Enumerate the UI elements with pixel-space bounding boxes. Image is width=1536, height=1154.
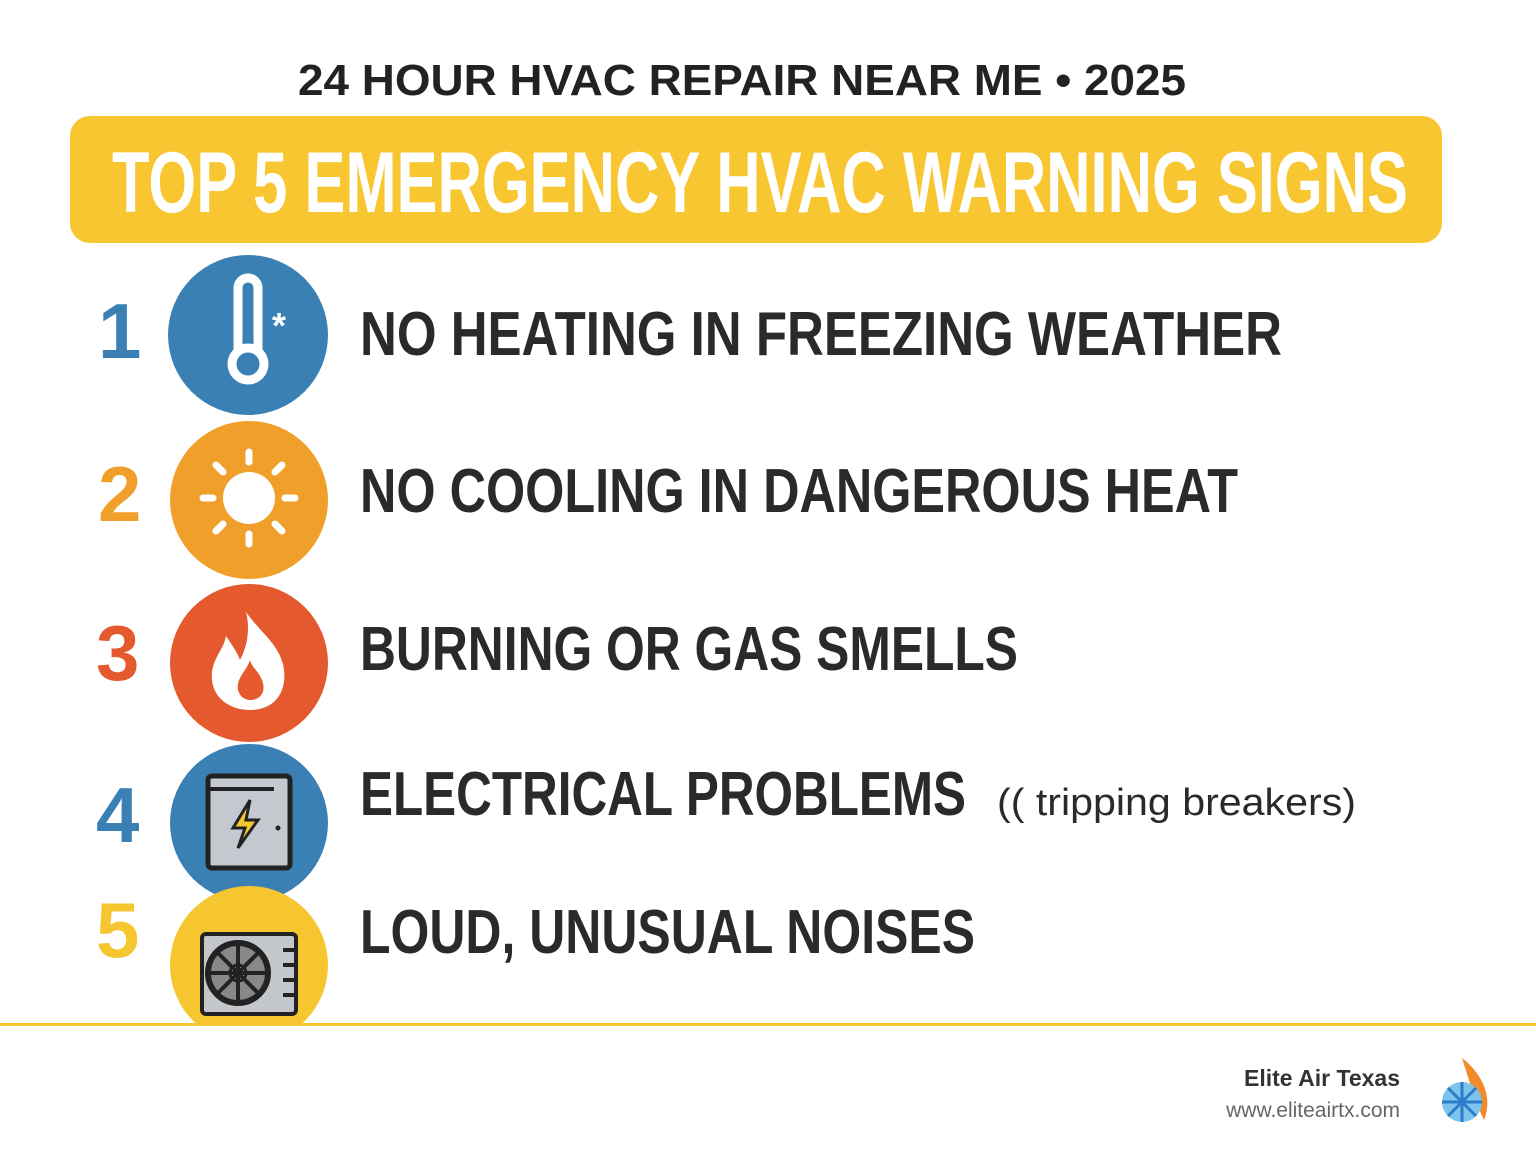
item 5	[98, 886, 974, 1023]
item 1: *	[272, 305, 286, 346]
item 1	[98, 255, 1282, 415]
item 4: 4	[96, 771, 139, 859]
title banner	[70, 116, 1442, 243]
subtitle: 24 HOUR HVAC REPAIR NEAR ME • 2025	[298, 56, 1186, 105]
item 2: 2	[98, 450, 141, 538]
icon: sun	[203, 452, 295, 544]
item 4: ELECTRICAL PROBLEMS	[360, 760, 966, 829]
item 5: LOUD, UNUSUAL NOISES	[360, 898, 975, 967]
icon: flame	[212, 612, 284, 710]
item 1: 1	[98, 287, 141, 375]
item 3: BURNING OR GAS SMELLS	[360, 615, 1018, 684]
item 3	[96, 584, 1018, 742]
icon: electrical panel	[208, 776, 290, 868]
footer brand	[1225, 1065, 1400, 1122]
item 4: (( tripping breakers)	[997, 782, 1356, 824]
item 1: NO HEATING IN FREEZING WEATHER	[360, 300, 1282, 369]
footer brand: www.eliteairtx.com	[1225, 1099, 1400, 1122]
item 2	[98, 421, 1238, 579]
icon: thermometer	[232, 278, 264, 380]
item 2: NO COOLING IN DANGEROUS HEAT	[360, 457, 1238, 526]
item 3: 3	[96, 609, 139, 697]
item 5: 5	[96, 886, 139, 974]
item 4	[96, 744, 1356, 902]
footer brand: Elite Air Texas	[1244, 1065, 1400, 1091]
icon: AC unit	[202, 934, 296, 1014]
logo: snowflake and flame	[1442, 1058, 1487, 1122]
